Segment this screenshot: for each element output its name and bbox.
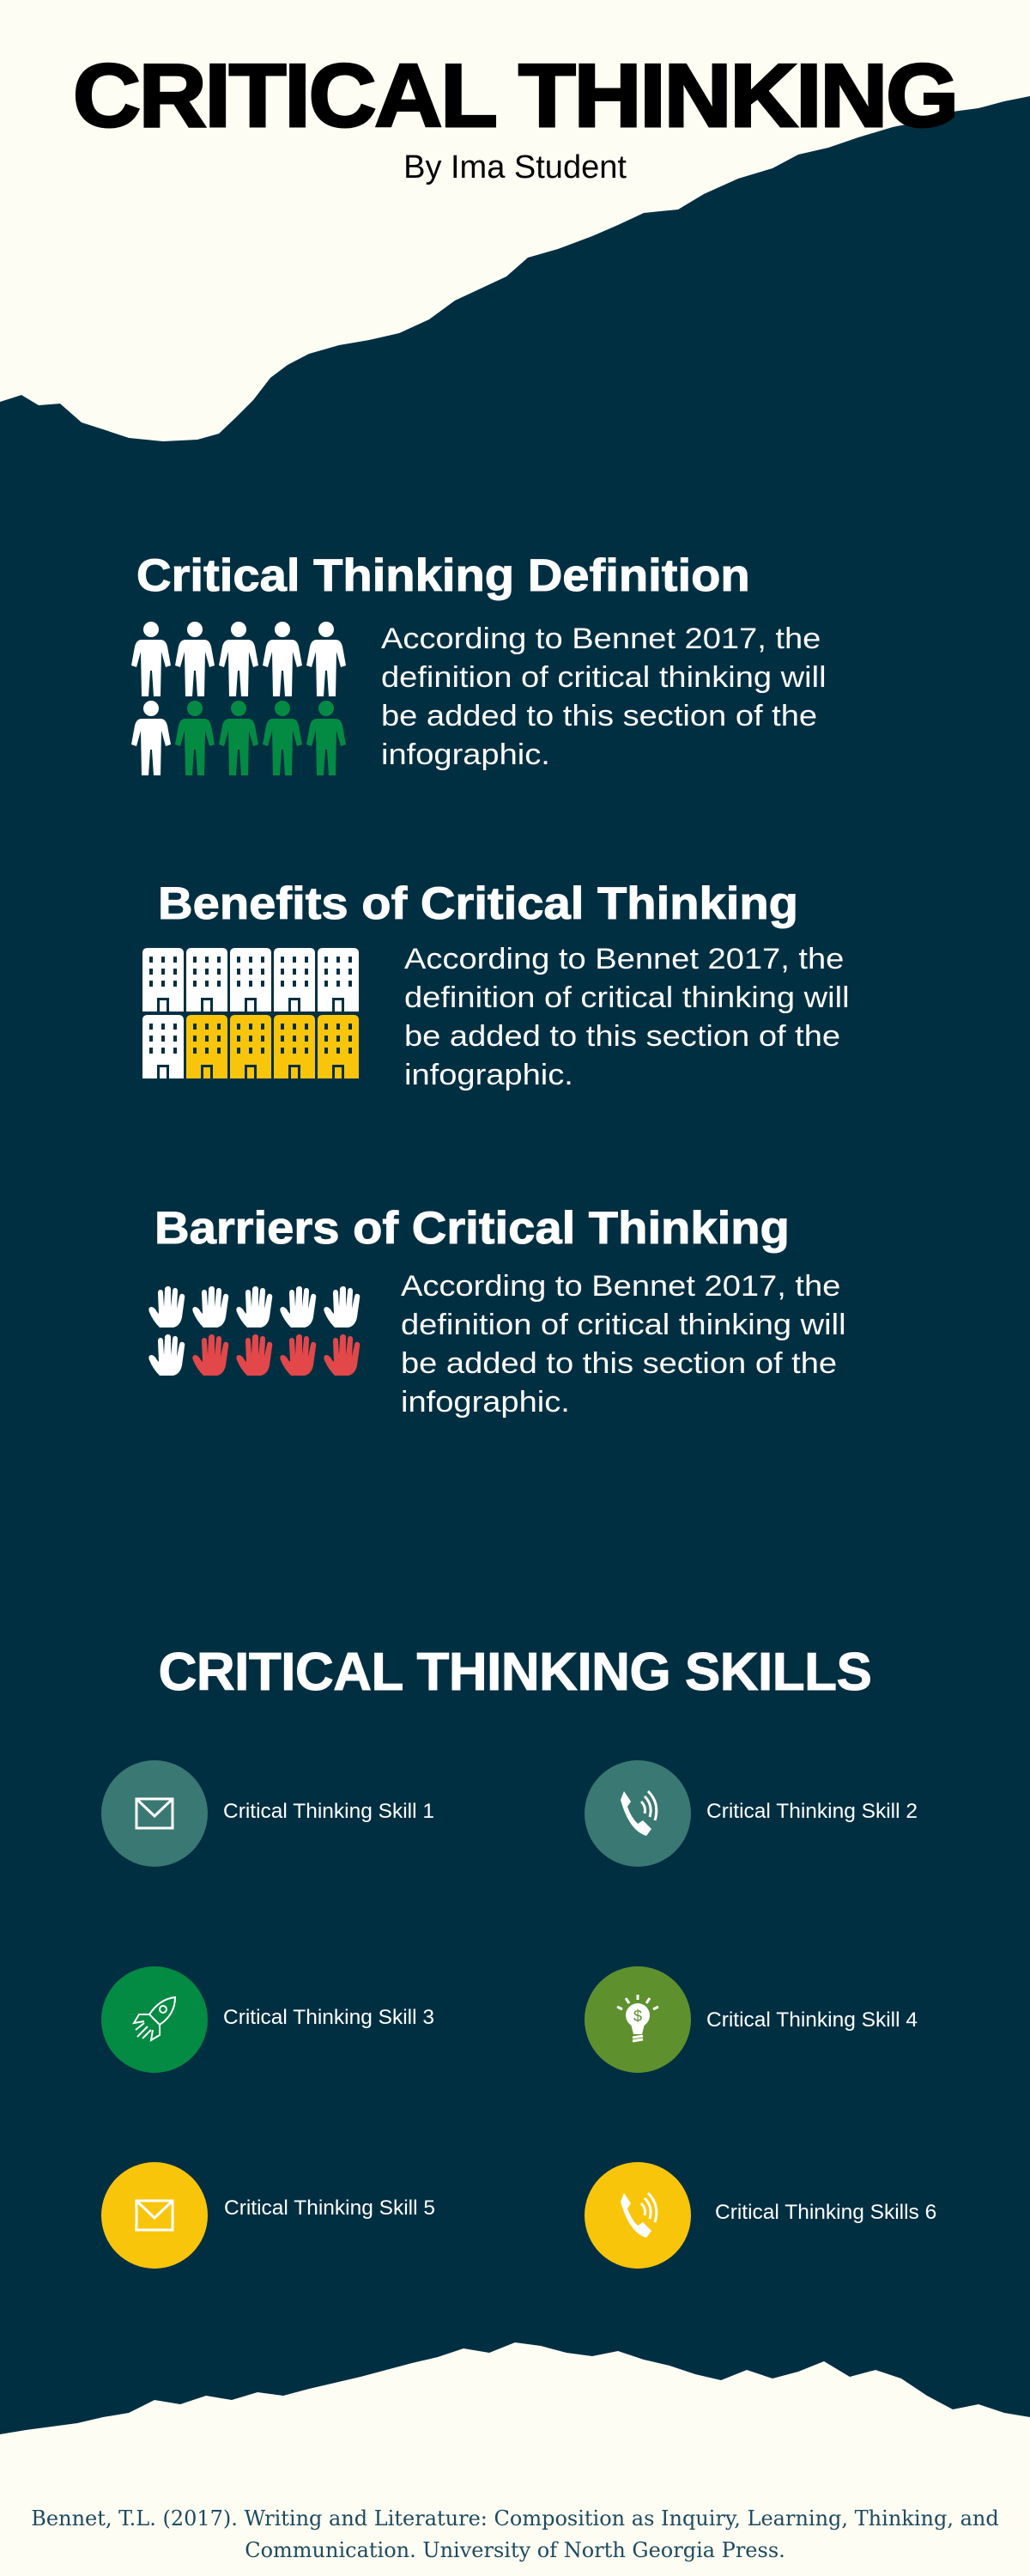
icon: rocket [101,1966,208,2073]
citation [31,2506,999,2562]
heading: barriers: Barriers of Critical Thinking [154,1203,790,1254]
skill 4: Critical Thinking Skill 4 [706,2008,918,2032]
text: definition: According to Bennet 2017, the [381,623,821,655]
skill 2 [585,1760,918,1867]
skill 2: Critical Thinking Skill 2 [706,1800,918,1823]
heading: benefits: Benefits of Critical Thinking [158,878,798,929]
text: benefits: infographic. [404,1059,573,1091]
icon: envelope [101,2162,208,2269]
skill 4 [585,1966,918,2073]
panel: skills grid [101,1760,936,2269]
text: definition [381,623,827,771]
text: barriers: definition of critical thinking will [401,1309,846,1341]
citation: Bennet, T.L. (2017). Writing and Literature: Composition as Inquiry, Learning, Thinking, and [31,2506,999,2530]
text: barriers [401,1270,846,1419]
icon: envelope [101,1760,208,1867]
skill 5: Critical Thinking Skill 5 [224,2196,435,2220]
text: definition: definition of critical thinking will [381,661,827,694]
icon: lightbulb [585,1966,691,2073]
icon: buildings grid [142,948,359,1078]
skill 3 [101,1966,434,2073]
text: benefits: be added to this section of the [404,1020,840,1053]
text: benefits: According to Bennet 2017, the [404,943,844,975]
panel: barriers [148,1203,846,1419]
icon: lightbulb: $ [633,2008,642,2025]
text: benefits [404,943,850,1091]
citation: Communication. University of North Georgia Press. [245,2538,785,2562]
text: barriers: infographic. [401,1386,570,1419]
skill 3: Critical Thinking Skill 3 [223,2006,434,2029]
text: benefits: definition of critical thinking will [404,981,850,1014]
panel: definition [131,550,827,775]
text: barriers: According to Bennet 2017, the [401,1270,840,1303]
skill 1: Critical Thinking Skill 1 [223,1800,434,1823]
skill 6: Critical Thinking Skills 6 [715,2201,936,2224]
icon: phone [585,2162,691,2269]
skill 5 [101,2162,435,2269]
icon: people grid [131,622,346,775]
title: CRITICAL THINKING [73,46,957,146]
text: definition: be added to this section of the [381,700,817,732]
panel: benefits [142,878,850,1091]
text: barriers: be added to this section of the [401,1347,837,1380]
icon: hands grid [148,1286,360,1376]
icon: phone [585,1760,691,1867]
heading: skills: CRITICAL THINKING SKILLS [159,1643,871,1702]
skill 1 [101,1760,434,1867]
text: definition: infographic. [381,738,550,771]
heading: definition: Critical Thinking Definition [136,550,750,601]
skill 6 [585,2162,936,2269]
subtitle: By Ima Student [403,149,627,185]
